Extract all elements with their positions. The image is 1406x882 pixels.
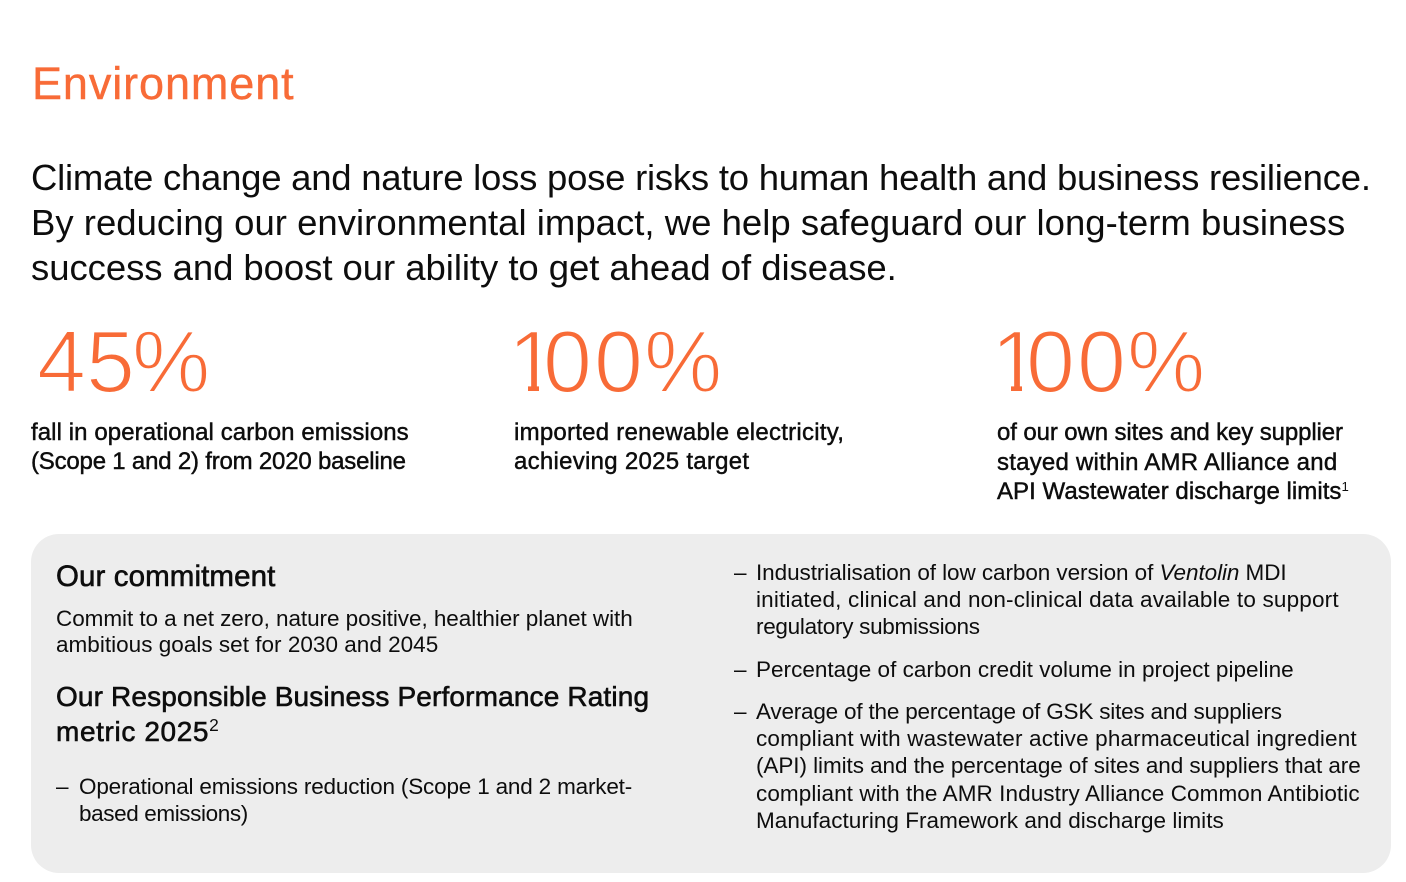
bullet: operational emissions: – bbox=[56, 774, 69, 799]
bullet: operational emissions: based emissions) bbox=[79, 801, 248, 826]
bullet: ventolin bbox=[734, 560, 1339, 639]
stat number bbox=[1000, 312, 1205, 411]
intro text block: By reducing our environmental impact, we help safeguard our long-term business bbox=[31, 202, 1345, 243]
bullet: wastewater bbox=[734, 699, 1361, 833]
stat caption bbox=[996, 419, 1349, 505]
heading: performance rating: Our Responsible Business Performance Rating bbox=[56, 681, 649, 712]
stat number: 0 bbox=[594, 312, 643, 411]
bullet: ventolin: – bbox=[734, 560, 747, 585]
stat caption: fall in operational carbon emissions bbox=[31, 419, 409, 446]
bullet: ventolin: initiated, clinical and non-clinical data available to support bbox=[756, 587, 1339, 612]
stat caption bbox=[514, 419, 844, 475]
stat number: 0 bbox=[1026, 312, 1075, 411]
stat number: 5 bbox=[86, 312, 135, 411]
stat caption: (Scope 1 and 2) from 2020 baseline bbox=[31, 448, 406, 475]
stat caption bbox=[31, 419, 409, 475]
heading: our commitment: Our commitment bbox=[56, 560, 275, 593]
bullet: operational emissions: Operational emissions reduction (Scope 1 and 2 market- bbox=[79, 774, 632, 799]
stat number: 1 bbox=[991, 312, 1040, 411]
intro text block bbox=[31, 157, 1371, 288]
bullet: wastewater: Manufacturing Framework and discharge limits bbox=[756, 808, 1224, 833]
heading: performance rating bbox=[56, 681, 649, 747]
bullet: ventolin: regulatory submissions bbox=[756, 614, 980, 639]
intro text block: success and boost our ability to get ahead of disease. bbox=[31, 247, 897, 288]
stat caption: stayed within AMR Alliance and bbox=[997, 448, 1337, 476]
stat number: % bbox=[1127, 312, 1205, 411]
bullet: wastewater: – bbox=[734, 699, 747, 724]
stat number: 0 bbox=[543, 312, 592, 411]
bullet: wastewater: compliant with the AMR Industry Alliance Common Antibiotic bbox=[756, 781, 1360, 806]
commitment text: ambitious goals set for 2030 and 2045 bbox=[56, 632, 438, 657]
stat caption: imported renewable electricity, bbox=[514, 419, 844, 446]
bullet: carbon credit: – bbox=[734, 657, 747, 682]
bullet: wastewater: (API) limits and the percentage of sites and suppliers that are bbox=[756, 753, 1361, 778]
stat: 100% renewable bbox=[514, 312, 844, 475]
heading: performance rating: metric 20252 bbox=[56, 715, 219, 747]
stat number: % bbox=[644, 312, 722, 411]
bullet: carbon credit: Percentage of carbon credit volume in project pipeline bbox=[756, 657, 1294, 682]
stat caption: of our own sites and key supplier bbox=[997, 419, 1343, 446]
panel: commitment bbox=[31, 534, 1391, 873]
stat number: 0 bbox=[1077, 312, 1126, 411]
commitment text: Commit to a net zero, nature positive, healthier planet with bbox=[56, 606, 633, 631]
bullet: ventolin: Industrialisation of low carbon version of Ventolin MDI bbox=[756, 560, 1287, 585]
stat number bbox=[37, 312, 210, 411]
stat number: 4 bbox=[37, 312, 86, 411]
stat caption: API Wastewater discharge limits1 bbox=[997, 478, 1349, 505]
stat: 100% sites bbox=[996, 312, 1349, 505]
stat number: % bbox=[132, 312, 210, 411]
bullet: operational emissions bbox=[56, 774, 632, 826]
bullet: wastewater: compliant with wastewater active pharmaceutical ingredient bbox=[756, 726, 1357, 751]
stat number bbox=[517, 312, 722, 411]
intro text block: Climate change and nature loss pose risks to human health and business resilience. bbox=[31, 157, 1371, 198]
commitment text bbox=[56, 606, 633, 657]
stat caption: achieving 2025 target bbox=[514, 448, 749, 475]
stat: 45% bbox=[31, 312, 409, 475]
stat number: 1 bbox=[508, 312, 557, 411]
title: Environment bbox=[32, 58, 295, 109]
bullet: wastewater: Average of the percentage of GSK sites and suppliers bbox=[756, 699, 1282, 724]
